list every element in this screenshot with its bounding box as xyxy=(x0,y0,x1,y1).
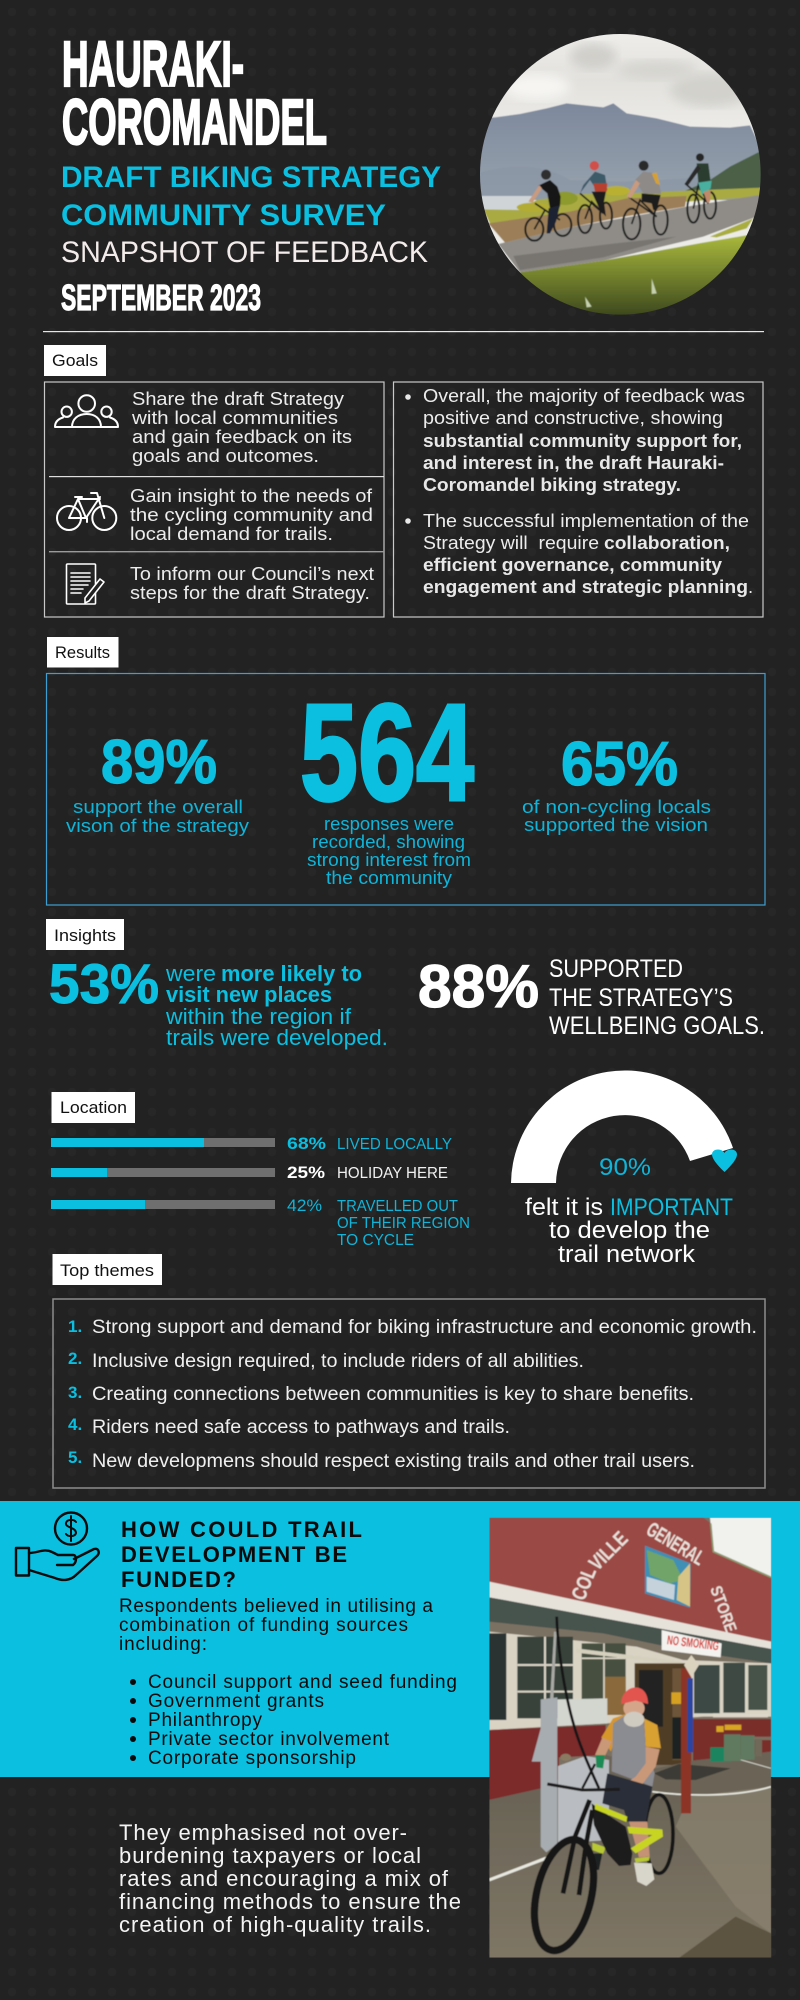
text: goal 1: and gain feedback on its xyxy=(132,426,352,447)
panel: results xyxy=(46,637,765,905)
stat: 564: strong interest from xyxy=(307,849,471,870)
funding list: Private sector involvement xyxy=(148,1729,390,1750)
stat: 53% xyxy=(49,952,388,1050)
theme 2: Inclusive design required, to include riders of all abilities. xyxy=(92,1351,584,1372)
funding closing text: financing methods to ensure the xyxy=(119,1889,461,1914)
bar: travelled: 42% xyxy=(287,1196,322,1215)
text: implementation: . xyxy=(748,576,753,597)
photo: cyclist at general store: COL xyxy=(567,1564,601,1604)
funding heading: FUNDED? xyxy=(121,1567,236,1592)
stat: 89%: vison of the strategy xyxy=(66,815,250,836)
stat: 89% xyxy=(66,728,250,836)
icon: hand with coin xyxy=(16,1512,99,1580)
funding heading xyxy=(121,1517,362,1592)
panel: goals xyxy=(44,345,763,617)
text: implementation: engagement and strategic planning xyxy=(423,576,748,597)
theme 1: Strong support and demand for biking infrastructure and economic growth. xyxy=(92,1317,757,1338)
gauge caption: trail network xyxy=(558,1241,696,1268)
gauge caption xyxy=(525,1194,733,1268)
gauge caption: felt it is xyxy=(525,1194,603,1221)
divider xyxy=(43,331,764,332)
funding list: Government grants xyxy=(148,1691,324,1712)
cyan band xyxy=(0,1501,800,1777)
theme 3: 3. xyxy=(68,1383,82,1402)
theme 5: 5. xyxy=(68,1448,82,1467)
bar: travelled: OF THEIR REGION xyxy=(337,1215,470,1232)
stat: 88%: 88% xyxy=(418,953,539,1020)
gauge value: 90% xyxy=(599,1154,651,1181)
label: location xyxy=(52,1092,135,1123)
label: insights: Insights xyxy=(54,927,116,945)
text: implementation: efficient governance, community xyxy=(423,554,723,575)
photo: cyclists in circle xyxy=(480,34,761,315)
panel: top themes xyxy=(52,1254,765,1488)
funding intro xyxy=(119,1596,433,1655)
icon: people xyxy=(55,395,118,427)
stat: 564: 564 xyxy=(300,676,474,830)
photo: cyclist at general store: STORE xyxy=(706,1583,741,1635)
label: goals: Goals xyxy=(52,352,98,370)
title: COROMANDEL xyxy=(62,86,327,158)
gauge caption: IMPORTANT xyxy=(610,1194,733,1221)
stat: 53%: were xyxy=(165,961,216,986)
stat: 65%: of non-cycling locals xyxy=(522,796,711,817)
label: location: Location xyxy=(60,1099,127,1117)
results box xyxy=(46,674,765,905)
photo: cyclist at general store xyxy=(489,1518,771,1958)
snapshot heading: SNAPSHOT OF FEEDBACK xyxy=(61,236,428,269)
stat: 564: the community xyxy=(326,867,453,888)
subtitle: COMMUNITY SURVEY xyxy=(61,199,386,232)
date: SEPTEMBER 2023 xyxy=(61,277,261,318)
label: top themes: Top themes xyxy=(60,1262,154,1280)
text: overall feedback: Coromandel biking strategy. xyxy=(423,474,681,495)
funding heading: DEVELOPMENT BE xyxy=(121,1542,347,1567)
stat: 53%: visit new places xyxy=(166,982,332,1007)
themes box xyxy=(53,1299,765,1488)
stat: 88%: WELLBEING GOALS. xyxy=(549,1012,765,1040)
stat: 53%: within the region if xyxy=(165,1004,352,1029)
bar: holiday here: 25% xyxy=(287,1163,325,1182)
funding closing text: creation of high-quality trails. xyxy=(119,1912,431,1937)
label: insights xyxy=(46,919,124,950)
stat: 564 xyxy=(300,676,474,888)
title xyxy=(62,28,327,158)
text: overall feedback xyxy=(423,385,745,495)
label: goals xyxy=(44,345,106,376)
text: goal 2: Gain insight to the needs of xyxy=(130,485,373,506)
funding closing text: rates and encouraging a mix of xyxy=(119,1866,449,1891)
bar: lived locally: 68% xyxy=(287,1134,326,1153)
subtitle xyxy=(61,161,441,232)
text: goal 2: local demand for trails. xyxy=(130,523,333,544)
text: overall feedback: Overall, the majority of feedback was xyxy=(423,385,745,406)
funding closing text xyxy=(119,1820,461,1937)
photo: cyclist at general store: NO SMOKING xyxy=(666,1633,720,1653)
text: goal 1 xyxy=(131,388,352,466)
bar: holiday here xyxy=(51,1163,448,1182)
title block xyxy=(61,28,441,318)
bar: travelled xyxy=(51,1196,470,1249)
stat: 53%: more likely to xyxy=(221,961,362,986)
funding list: Philanthropy xyxy=(148,1710,262,1731)
text: goal 1: goals and outcomes. xyxy=(132,445,319,466)
funding list: Council support and seed funding xyxy=(148,1672,457,1693)
stat: 53%: 53% xyxy=(49,952,159,1015)
stat: 53%: trails were developed. xyxy=(166,1025,388,1050)
summary box xyxy=(394,382,763,617)
photo: cyclist at general store: GENERAL xyxy=(642,1518,709,1570)
stat: 564: responses were xyxy=(324,813,454,834)
theme 4: 4. xyxy=(68,1415,82,1434)
theme 4: Riders need safe access to pathways and trails. xyxy=(92,1417,510,1438)
text: implementation xyxy=(423,510,753,597)
text: goal 3: To inform our Council’s next xyxy=(130,563,374,584)
text: overall feedback: substantial community support for, xyxy=(423,430,742,451)
bar: travelled: TRAVELLED OUT xyxy=(337,1198,458,1215)
label: top themes xyxy=(52,1254,162,1285)
icon: heart xyxy=(712,1150,737,1172)
text: goal 1: Share the draft Strategy xyxy=(132,388,345,409)
gauge arc xyxy=(511,1070,733,1183)
subtitle: DRAFT BIKING STRATEGY xyxy=(61,161,441,194)
bar: travelled: TO CYCLE xyxy=(337,1232,414,1249)
stat: 88% xyxy=(418,953,765,1040)
text: implementation: Strategy will require xyxy=(423,532,599,553)
stat: 88%: SUPPORTED xyxy=(549,955,683,983)
panel: insights xyxy=(46,919,765,1050)
icon: bicycle xyxy=(57,493,116,530)
text: goal 2: the cycling community and xyxy=(130,504,373,525)
stat: 89%: support the overall xyxy=(73,796,243,817)
funding closing text: They emphasised not over- xyxy=(119,1820,407,1845)
funding list: Corporate sponsorship xyxy=(148,1748,356,1769)
gauge: 90% important xyxy=(511,1070,737,1268)
photo: cyclist at general store: VILLE xyxy=(585,1527,633,1575)
funding closing text: burdening taxpayers or local xyxy=(119,1843,421,1868)
bar: lived locally xyxy=(51,1134,452,1153)
text: overall feedback: and interest in, the draft Hauraki- xyxy=(423,452,724,473)
funding list xyxy=(130,1672,457,1769)
panel: location xyxy=(51,1092,470,1249)
funding intro: combination of funding sources xyxy=(119,1615,408,1636)
text: goal 2 xyxy=(130,485,373,544)
label: results xyxy=(47,637,118,668)
title: HAURAKI- xyxy=(62,28,244,100)
text: goal 3 xyxy=(130,563,374,603)
theme 1: 1. xyxy=(68,1317,82,1336)
theme 2: 2. xyxy=(68,1349,82,1368)
text: implementation: collaboration, xyxy=(604,532,730,553)
gauge caption: to develop the xyxy=(549,1217,710,1244)
panel: funding xyxy=(0,1501,800,1937)
bar: lived locally: LIVED LOCALLY xyxy=(337,1136,452,1153)
stat: 88%: THE STRATEGY’S xyxy=(549,984,733,1012)
text: goal 1: with local communities xyxy=(131,407,338,428)
icon: document xyxy=(66,564,104,604)
stat: 89%: 89% xyxy=(101,728,217,797)
funding intro: Respondents believed in utilising a xyxy=(119,1596,433,1617)
goals box xyxy=(44,382,384,617)
funding heading: HOW COULD TRAIL xyxy=(121,1517,362,1542)
stat: 65% xyxy=(522,730,711,835)
stat: 65%: 65% xyxy=(561,730,678,799)
stat: 564: recorded, showing xyxy=(312,831,465,852)
theme 5: New developmens should respect existing trails and other trail users. xyxy=(92,1451,695,1472)
label: results: Results xyxy=(55,644,110,662)
text: overall feedback: positive and constructive, showing xyxy=(423,407,723,428)
text: goal 3: steps for the draft Strategy. xyxy=(130,582,370,603)
theme 3: Creating connections between communities is key to share benefits. xyxy=(92,1384,694,1405)
funding intro: including: xyxy=(119,1634,207,1655)
text: implementation: The successful implementation of the xyxy=(423,510,749,531)
stat: 65%: supported the vision xyxy=(524,814,708,835)
bar: holiday here: HOLIDAY HERE xyxy=(337,1165,448,1182)
